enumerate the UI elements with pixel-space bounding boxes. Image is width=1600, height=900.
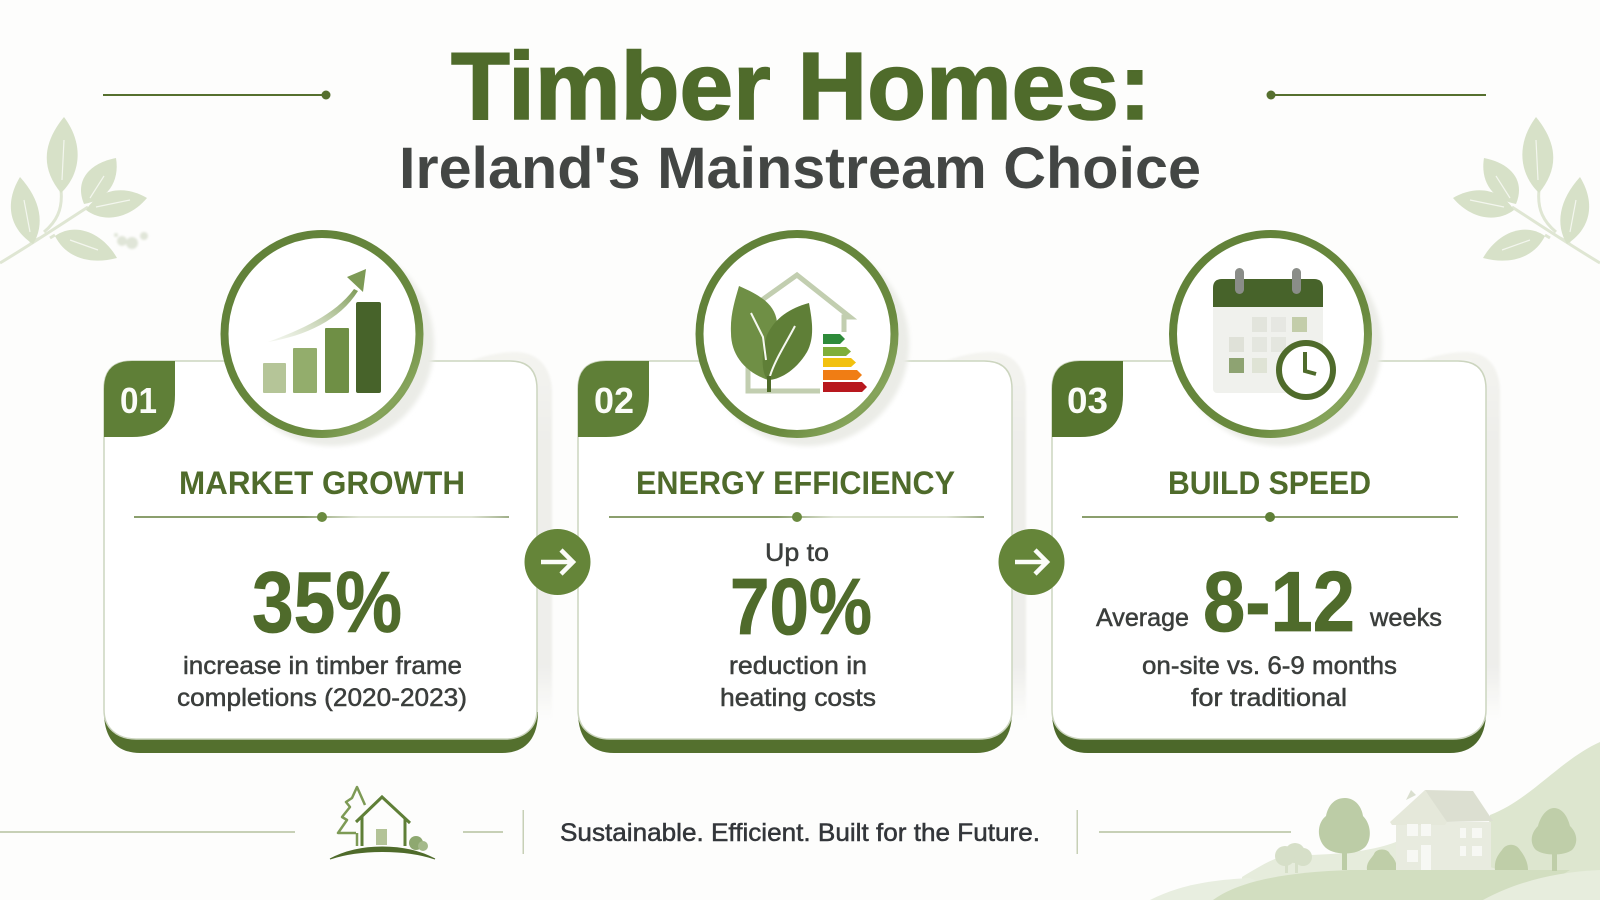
icon: leaf house with energy rating xyxy=(700,234,909,446)
divider xyxy=(1082,512,1458,522)
decoration: landscape with house xyxy=(1150,742,1600,900)
panel: market growth xyxy=(104,234,552,753)
heading: MARKET GROWTH xyxy=(179,465,465,501)
decoration: top-left leaves xyxy=(0,117,148,263)
badge 02 xyxy=(578,361,649,437)
description: for traditional xyxy=(1191,684,1347,712)
arrow: market to energy xyxy=(524,529,590,595)
description xyxy=(177,652,467,712)
stat with labels: Average xyxy=(1096,604,1189,632)
footer rule right xyxy=(1099,831,1291,833)
footer rule left xyxy=(0,831,503,833)
arrow: energy to speed xyxy=(998,529,1064,595)
stat with labels: weeks xyxy=(1369,604,1442,632)
tree right xyxy=(1532,808,1576,871)
title: Timber Homes: xyxy=(451,33,1151,140)
panel: energy efficiency xyxy=(578,234,1026,753)
description: on-site vs. 6-9 months xyxy=(1142,652,1397,680)
tree left xyxy=(1319,798,1370,870)
badge 03: 03 xyxy=(1067,380,1108,421)
heading: BUILD SPEED xyxy=(1168,465,1371,501)
description: heating costs xyxy=(720,684,876,712)
description: increase in timber frame xyxy=(183,652,462,680)
description: completions (2020-2023) xyxy=(177,684,467,712)
header rule right xyxy=(1266,90,1486,100)
divider left xyxy=(522,810,524,854)
header rule left xyxy=(103,90,330,100)
stat 35%: 35% xyxy=(252,555,402,651)
stat with labels xyxy=(1096,555,1442,650)
badge 03 xyxy=(1052,361,1123,437)
divider xyxy=(134,512,509,522)
description xyxy=(720,652,876,712)
bushes xyxy=(1367,850,1397,870)
description xyxy=(1142,652,1397,712)
icon: growth chart xyxy=(224,234,434,446)
heading: ENERGY EFFICIENCY xyxy=(636,465,955,501)
icon: calendar and clock xyxy=(1173,234,1382,446)
badge 01: 01 xyxy=(120,380,157,421)
lead-in: Up to xyxy=(765,539,829,567)
badge 02: 02 xyxy=(594,380,634,421)
icon: house and tree logo xyxy=(330,787,435,859)
panel: build speed xyxy=(1052,234,1500,753)
stat 70%: 70% xyxy=(730,562,872,651)
divider right xyxy=(1076,810,1078,854)
stat with labels: 8-12 xyxy=(1203,555,1355,650)
description: reduction in xyxy=(729,652,867,680)
decoration: top-right leaves xyxy=(1453,117,1600,263)
divider xyxy=(609,512,984,522)
badge 01 xyxy=(104,361,175,437)
faint trees xyxy=(1275,843,1312,873)
tagline: Sustainable. Efficient. Built for the Future. xyxy=(560,819,1040,847)
house xyxy=(1390,790,1493,870)
subtitle: Ireland's Mainstream Choice xyxy=(399,136,1201,201)
